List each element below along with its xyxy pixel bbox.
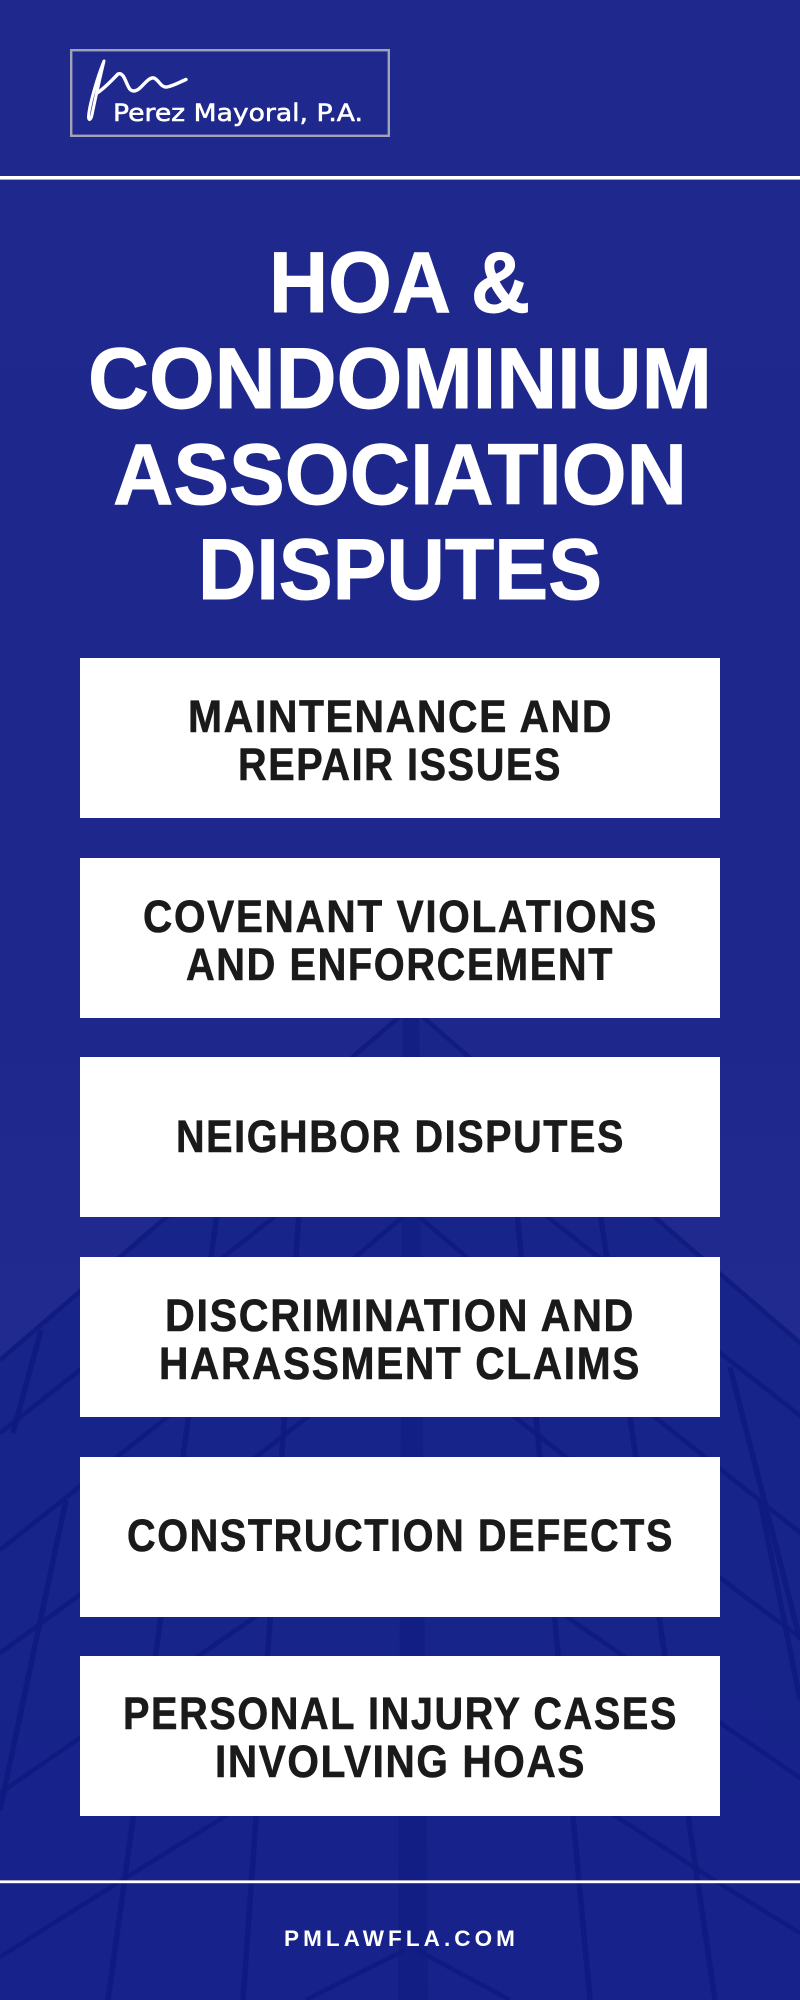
panel: personal injury cases involving HOAs (80, 1656, 720, 1816)
panel: maintenance and repair issues: REPAIR ISSUES (238, 739, 562, 790)
bottom divider line (0, 1880, 800, 1883)
panel: personal injury cases involving HOAs: PERSONAL INJURY CASES (123, 1688, 678, 1739)
panel: maintenance and repair issues (80, 658, 720, 818)
title: CONDOMINIUM (88, 331, 712, 427)
panel: personal injury cases involving HOAs: INVOLVING HOAS (215, 1736, 586, 1787)
logo: Perez Mayoral, P.A. (71, 50, 389, 136)
panel: discrimination and harassment claims: DISCRIMINATION AND (165, 1290, 635, 1341)
panel: covenant violations and enforcement: AND ENFORCEMENT (186, 939, 614, 990)
panel: construction defects (80, 1457, 720, 1617)
panel: neighbor disputes: NEIGHBOR DISPUTES (176, 1111, 625, 1162)
logo frame (71, 50, 389, 136)
title: DISPUTES (198, 522, 602, 618)
panel: neighbor disputes (80, 1057, 720, 1217)
title: HOA & (269, 235, 530, 331)
panel: maintenance and repair issues: MAINTENANCE AND (188, 691, 613, 742)
panel: covenant violations and enforcement: COVENANT VIOLATIONS (143, 891, 658, 942)
panel: construction defects: CONSTRUCTION DEFECTS (127, 1510, 674, 1561)
title: ASSOCIATION (113, 427, 687, 523)
footer website: PMLAWFLA.COM (284, 1926, 519, 1951)
panel: covenant violations and enforcement (80, 858, 720, 1018)
icon: signature mark (88, 61, 186, 119)
top divider line (0, 176, 800, 180)
title (88, 235, 712, 618)
panel: discrimination and harassment claims (80, 1257, 720, 1417)
logo wordmark: Perez Mayoral, P.A. (113, 99, 363, 127)
panel: discrimination and harassment claims: HARASSMENT CLAIMS (159, 1338, 641, 1389)
